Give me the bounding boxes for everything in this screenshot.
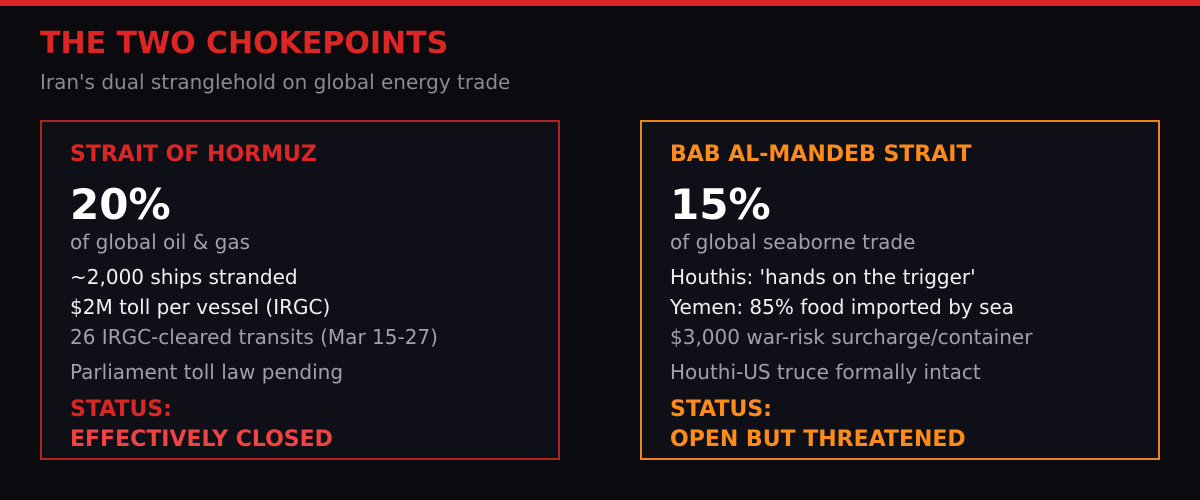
facts list: ~2,000 ships stranded [70,265,298,289]
panel: bab al-mandeb [641,121,1159,459]
facts list: Houthis: 'hands on the trigger' [670,265,976,289]
stat label: of global oil & gas [70,230,250,254]
facts list: Parliament toll law pending [70,360,343,384]
facts list: Houthi-US truce formally intact [670,360,981,384]
facts list: $2M toll per vessel (IRGC) [70,295,330,319]
panel: strait of hormuz [41,121,559,459]
title: THE TWO CHOKEPOINTS [40,26,448,61]
status: hormuz: EFFECTIVELY CLOSED [70,427,333,452]
facts list [669,265,1033,384]
stat: 20%: 20% [70,180,171,229]
heading: hormuz: STRAIT OF HORMUZ [70,142,317,167]
status: hormuz [70,397,333,452]
status: bab al-mandeb: OPEN BUT THREATENED [670,427,966,452]
subtitle: Iran's dual stranglehold on global energy trade [40,70,510,94]
stat label: of global seaborne trade [670,230,915,254]
heading: bab al-mandeb: BAB AL-MANDEB STRAIT [670,142,971,167]
facts list [70,265,438,384]
status: bab al-mandeb: STATUS: [670,397,772,422]
status: bab al-mandeb [670,397,966,452]
status: hormuz: STATUS: [70,397,172,422]
facts list: Yemen: 85% food imported by sea [669,295,1014,319]
facts list: 26 IRGC-cleared transits (Mar 15-27) [70,325,438,349]
facts list: $3,000 war-risk surcharge/container [670,325,1033,349]
stat: 15%: 15% [670,180,771,229]
